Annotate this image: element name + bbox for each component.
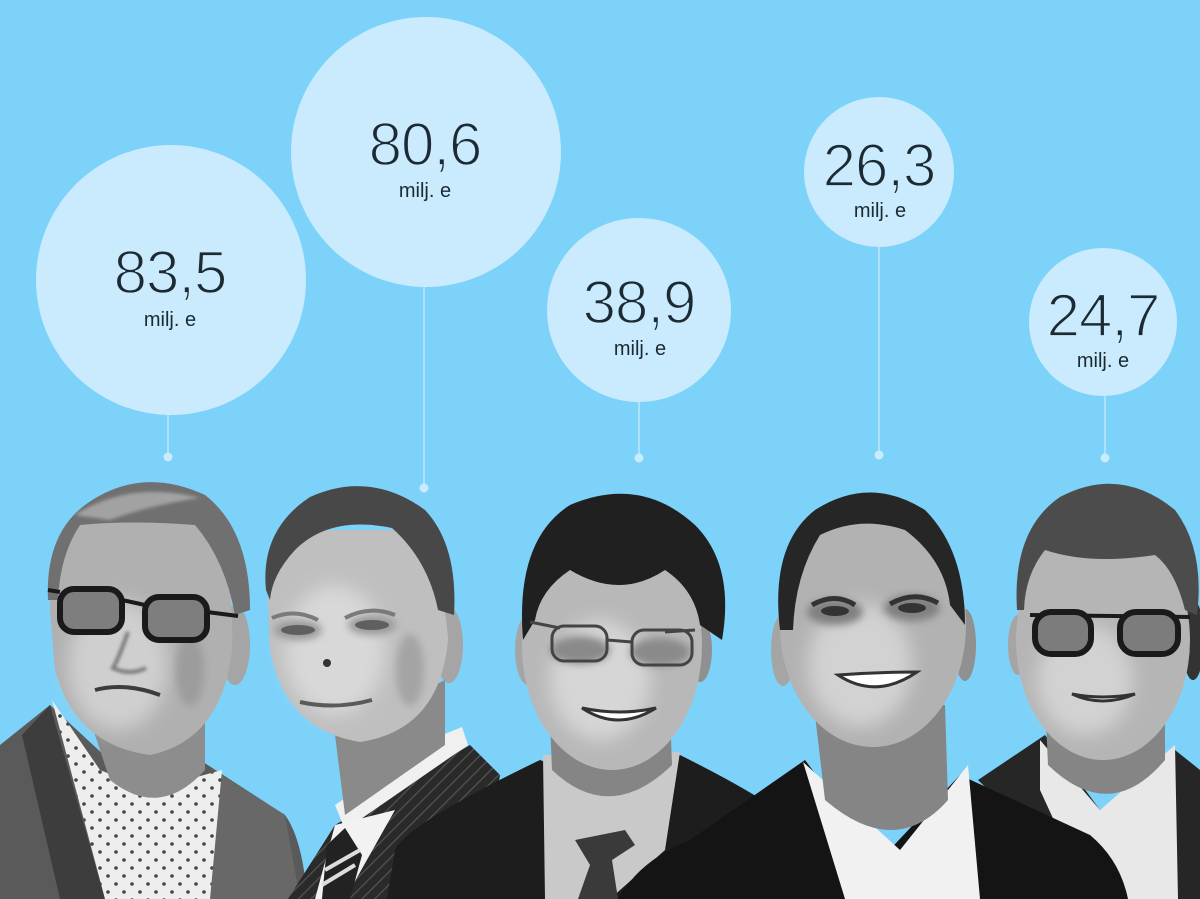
portrait: person 5 xyxy=(978,484,1200,899)
bubble: 24,7 milj. e: milj. e xyxy=(1077,350,1129,372)
bubble: 83,5 milj. e xyxy=(36,145,306,462)
portrait: person 4 xyxy=(618,492,1128,899)
bubble: 24,7 milj. e: 24,7 xyxy=(1047,282,1159,349)
bubble: 38,9 milj. e: 38,9 xyxy=(583,269,695,336)
bubble: 38,9 milj. e xyxy=(547,218,731,462)
bubble: 83,5 milj. e: 83,5 xyxy=(114,239,226,306)
bubble: 26,3 milj. e: milj. e xyxy=(854,200,906,222)
portrait: person 2 xyxy=(265,486,500,899)
bubble: 83,5 milj. e: milj. e xyxy=(144,309,196,331)
bubble: 80,6 milj. e: milj. e xyxy=(399,180,451,202)
bubble: 24,7 milj. e xyxy=(1029,248,1177,462)
bubble: 26,3 milj. e xyxy=(804,97,954,460)
bubble: 38,9 milj. e: milj. e xyxy=(614,338,666,360)
bubble: 80,6 milj. e: 80,6 xyxy=(369,111,481,178)
bubble: 80,6 milj. e xyxy=(291,17,561,492)
portrait: person 1 xyxy=(0,482,307,899)
portrait: person 3 xyxy=(387,494,770,899)
bubble: 26,3 milj. e: 26,3 xyxy=(823,132,935,199)
